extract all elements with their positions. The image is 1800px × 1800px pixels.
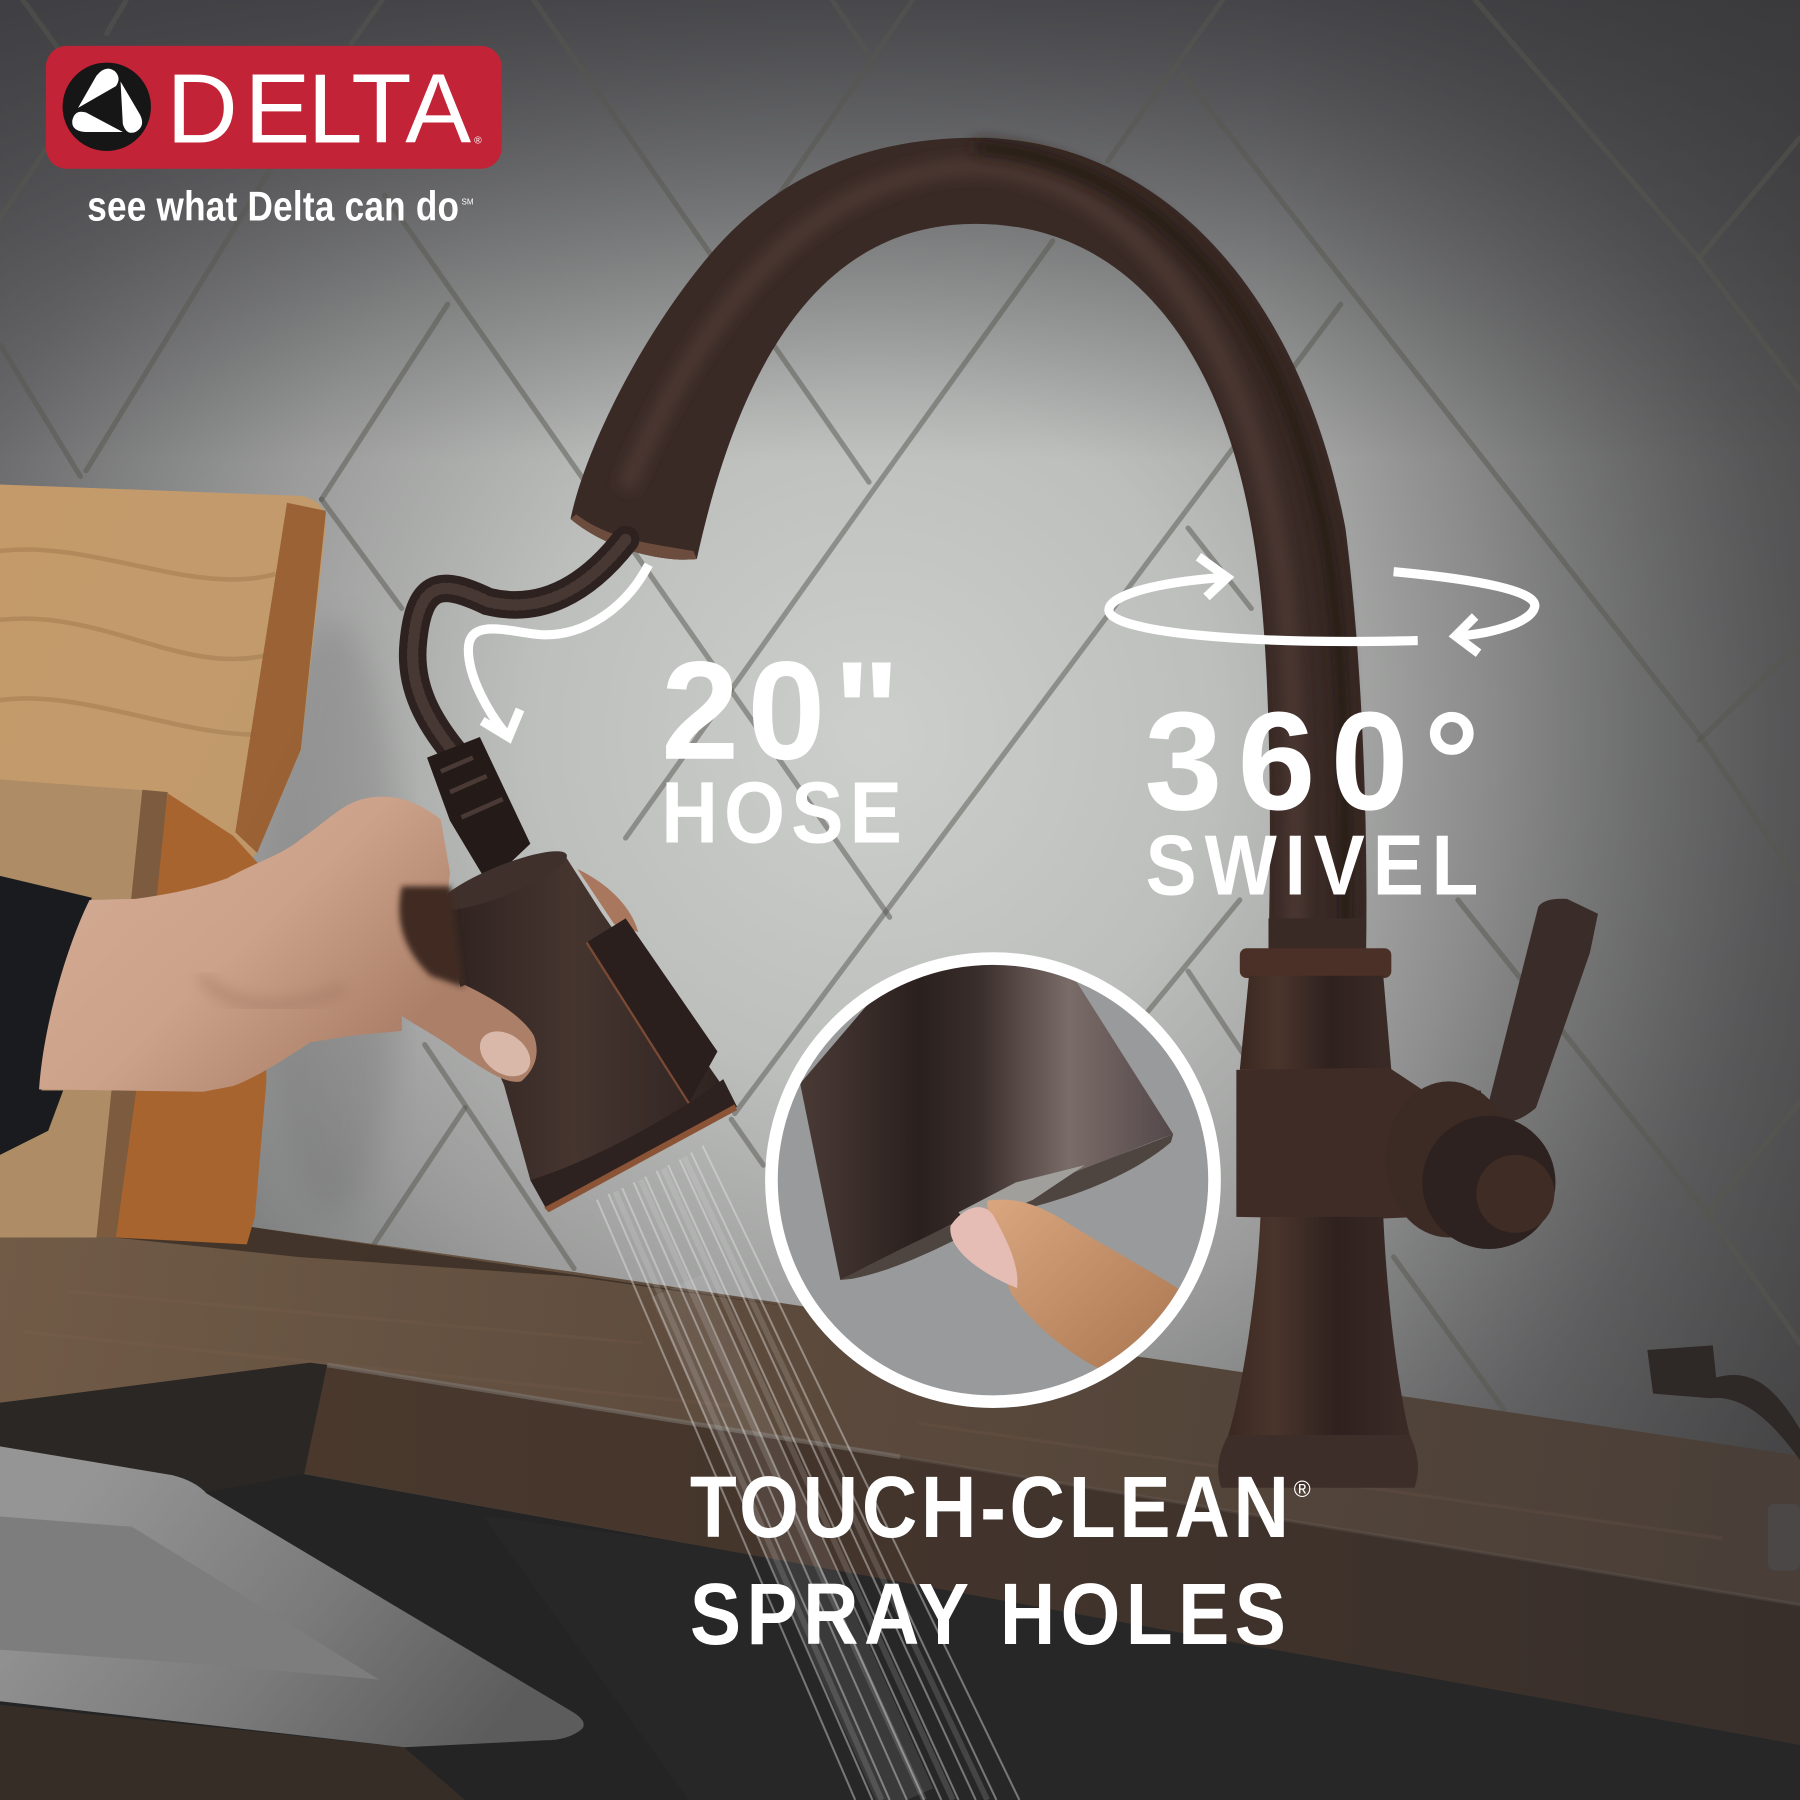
- inset: spray head close-up: [800, 959, 1182, 1373]
- arrow: hose extension: [468, 565, 649, 737]
- label: 360 degree swivel: SWIVEL: [1146, 819, 1478, 913]
- water spray: [597, 1146, 1019, 1800]
- logo wordmark: DELTA: [166, 53, 471, 163]
- label: 360 degree swivel: 360°: [1145, 682, 1480, 839]
- registered mark: ®: [474, 135, 482, 146]
- label: 20 inch hose: 20": [661, 632, 900, 789]
- small side faucet right: [1647, 1345, 1800, 1570]
- hand: back fingers: [577, 869, 638, 932]
- label: touch-clean spray holes: [690, 1460, 1311, 1663]
- arrow: swivel rotation: [1109, 557, 1535, 653]
- label: touch-clean spray holes: SPRAY HOLES: [690, 1566, 1286, 1663]
- sink basin: [0, 1363, 1800, 1800]
- pull-down hose: [413, 540, 626, 752]
- counter top: [0, 1227, 1800, 1607]
- hand: palm and thumb: [39, 797, 539, 1092]
- Delta logo badge: [46, 46, 502, 169]
- tagline: SM: [461, 197, 474, 206]
- logo emblem: [63, 63, 151, 151]
- cutting boards: [0, 484, 326, 1244]
- label: touch-clean spray holes: ®: [1294, 1476, 1311, 1502]
- white plate in sink: [0, 1446, 584, 1800]
- tagline: see what Delta can do: [87, 184, 459, 230]
- label: 20 inch hose: [661, 632, 902, 862]
- arm sleeve: [0, 876, 92, 1155]
- counter front edge: [304, 1365, 1800, 1745]
- label: 20 inch hose: HOSE: [661, 764, 902, 862]
- label: touch-clean spray holes: TOUCH-CLEAN: [690, 1460, 1289, 1556]
- inset: fingertip: [987, 1200, 1182, 1373]
- inset: fingernail: [950, 1207, 1017, 1288]
- faucet spout: [571, 138, 1366, 953]
- label: 360 degree swivel: [1145, 682, 1480, 913]
- pull-down spray head: [427, 737, 737, 1212]
- faucet base and handle: [1218, 899, 1598, 1488]
- inset detail circle: [771, 959, 1215, 1402]
